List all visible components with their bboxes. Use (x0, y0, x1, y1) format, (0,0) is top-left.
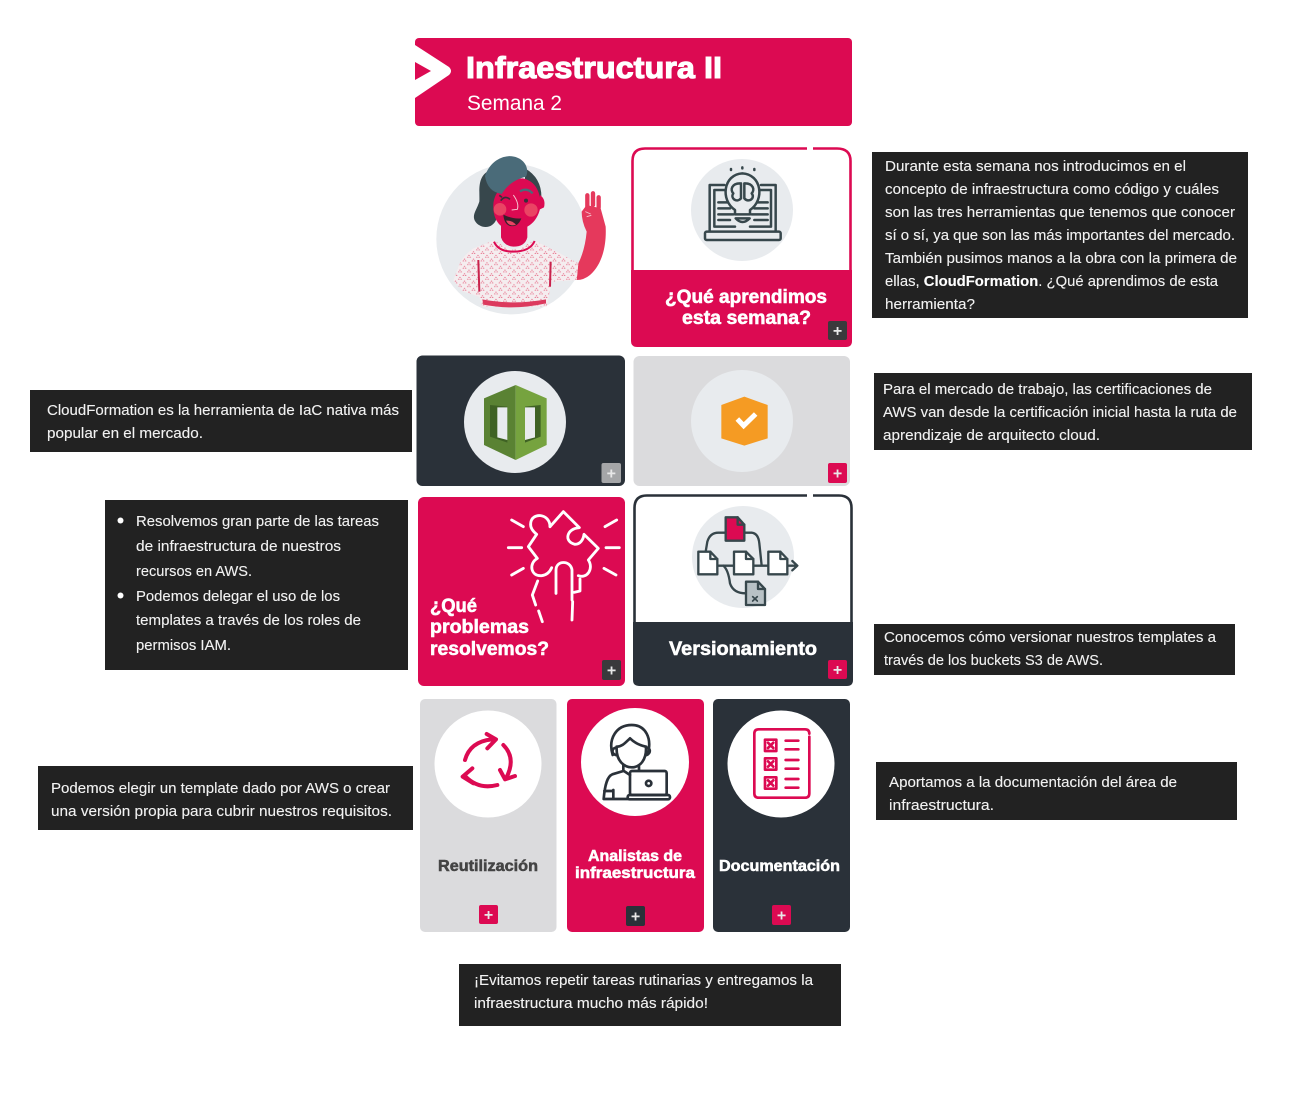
plus button: + (777, 908, 786, 924)
callout: versionamiento: Conocemos cómo versionar nuestros templates a (884, 629, 1217, 646)
label: infraestructura (575, 865, 695, 882)
callout: problemas (105, 500, 408, 670)
callout: versionamiento (874, 624, 1235, 675)
callout: documentacion (876, 762, 1237, 820)
callout: certificaciones: aprendizaje de arquitecto cloud. (883, 427, 1100, 444)
plus button (602, 660, 621, 680)
panel: que aprendimos (631, 145, 852, 347)
plus button: + (833, 466, 842, 482)
panel: cloudformation (416, 356, 625, 486)
plus button: + (631, 908, 640, 926)
heading: ¿Qué (430, 596, 477, 617)
callout: semana: concepto de infraestructura como código y cuáles (885, 181, 1219, 198)
heading: Versionamiento (669, 639, 817, 660)
callout: semana: sí o sí, ya que son las más importantes del mercado. (885, 227, 1235, 244)
illustration: waving woman (436, 156, 606, 314)
callout: semana: También pusimos manos a la obra con la primera de (885, 250, 1237, 267)
icon: lightbulb and laptop (705, 167, 781, 240)
plus button (828, 463, 847, 483)
plus button (479, 905, 498, 924)
plus button (828, 660, 847, 679)
callout: documentacion: infraestructura. (889, 797, 994, 814)
callout: problemas: Podemos delegar el uso de los (136, 588, 340, 605)
icon: checklist (754, 729, 809, 798)
callout: reutilizacion: Podemos elegir un template dado por AWS o crear (51, 780, 390, 797)
heading: resolvemos? (430, 639, 549, 660)
callout: analistas: infraestructura mucho más rápido! (474, 995, 708, 1012)
panel: problemas (418, 497, 625, 686)
callout: documentacion: Aportamos a la documentación del área de (889, 774, 1177, 791)
panel: analistas (567, 699, 704, 932)
neck (501, 222, 527, 247)
callout: certificaciones: Para el mercado de trabajo, las certificaciones de (883, 381, 1212, 398)
callout: cloudformation (30, 390, 412, 452)
arm and hand (577, 193, 606, 280)
plus button: + (833, 662, 842, 679)
panel: certificaciones (634, 356, 850, 486)
label: Analistas de (588, 848, 682, 865)
label: Documentación (719, 858, 840, 875)
plus button: + (833, 323, 842, 340)
callout: cloudformation: CloudFormation es la herramienta de IaC nativa más (47, 402, 399, 419)
top hair (485, 156, 527, 194)
icon: cloudformation cube (484, 385, 547, 460)
plus button (772, 905, 791, 925)
callout: reutilizacion: una versión propia para cubrir nuestros requisitos. (51, 803, 392, 820)
panel: versionamiento (633, 492, 853, 686)
callout: cloudformation: popular en el mercado. (47, 425, 203, 442)
heading (665, 287, 827, 329)
label (575, 848, 695, 882)
callout: semana (872, 152, 1248, 318)
icon: recycle arrows (463, 734, 515, 786)
panel: documentacion (713, 699, 850, 932)
label: Reutilización (438, 858, 538, 875)
heading: ¿Qué aprendimos (665, 287, 827, 308)
callout: analistas: ¡Evitamos repetir tareas rutinarias y entregamos la (474, 972, 814, 989)
callout: problemas: recursos en AWS. (136, 563, 252, 580)
icon: puzzle hand (508, 512, 619, 622)
subtitle: Semana 2 (467, 92, 562, 115)
icon: analyst with laptop (604, 725, 670, 799)
title: Infraestructura II (466, 50, 722, 85)
callout: analistas (459, 964, 841, 1026)
header banner (415, 38, 852, 126)
plus button: + (484, 907, 493, 924)
callout: semana: ellas, CloudFormation. ¿Qué aprendimos de esta (885, 273, 1219, 290)
plus button: + (607, 662, 616, 680)
callout: certificaciones: AWS van desde la certificación inicial hasta la ruta de (883, 404, 1237, 421)
plus button (828, 321, 847, 340)
icon: versioned documents (698, 517, 797, 605)
callout: semana: herramienta? (885, 296, 975, 313)
icon: orange badge (721, 397, 768, 446)
callout: semana: Durante esta semana nos introducimos en el (885, 158, 1186, 175)
heading (430, 596, 549, 660)
heading: esta semana? (682, 308, 811, 329)
callout: semana: son las tres herramientas que tenemos que conocer (885, 204, 1235, 221)
callout: problemas: permisos IAM. (136, 637, 231, 654)
sweater (453, 241, 578, 307)
panel: reutilizacion (420, 699, 556, 932)
heading: problemas (430, 617, 529, 638)
plus button (626, 906, 645, 926)
plus button (602, 463, 621, 483)
dark hair (474, 168, 541, 227)
plus button: + (607, 466, 616, 482)
callout: problemas: templates a través de los roles de (136, 612, 361, 629)
callout: versionamiento: través de los buckets S3 de AWS. (884, 652, 1103, 669)
callout: problemas: de infraestructura de nuestros (136, 538, 341, 555)
icon: white chevron (415, 45, 451, 98)
callout: problemas: Resolvemos gran parte de las tareas (136, 513, 379, 530)
callout: certificaciones (874, 373, 1252, 450)
face (493, 178, 541, 230)
callout: reutilizacion (38, 766, 413, 830)
